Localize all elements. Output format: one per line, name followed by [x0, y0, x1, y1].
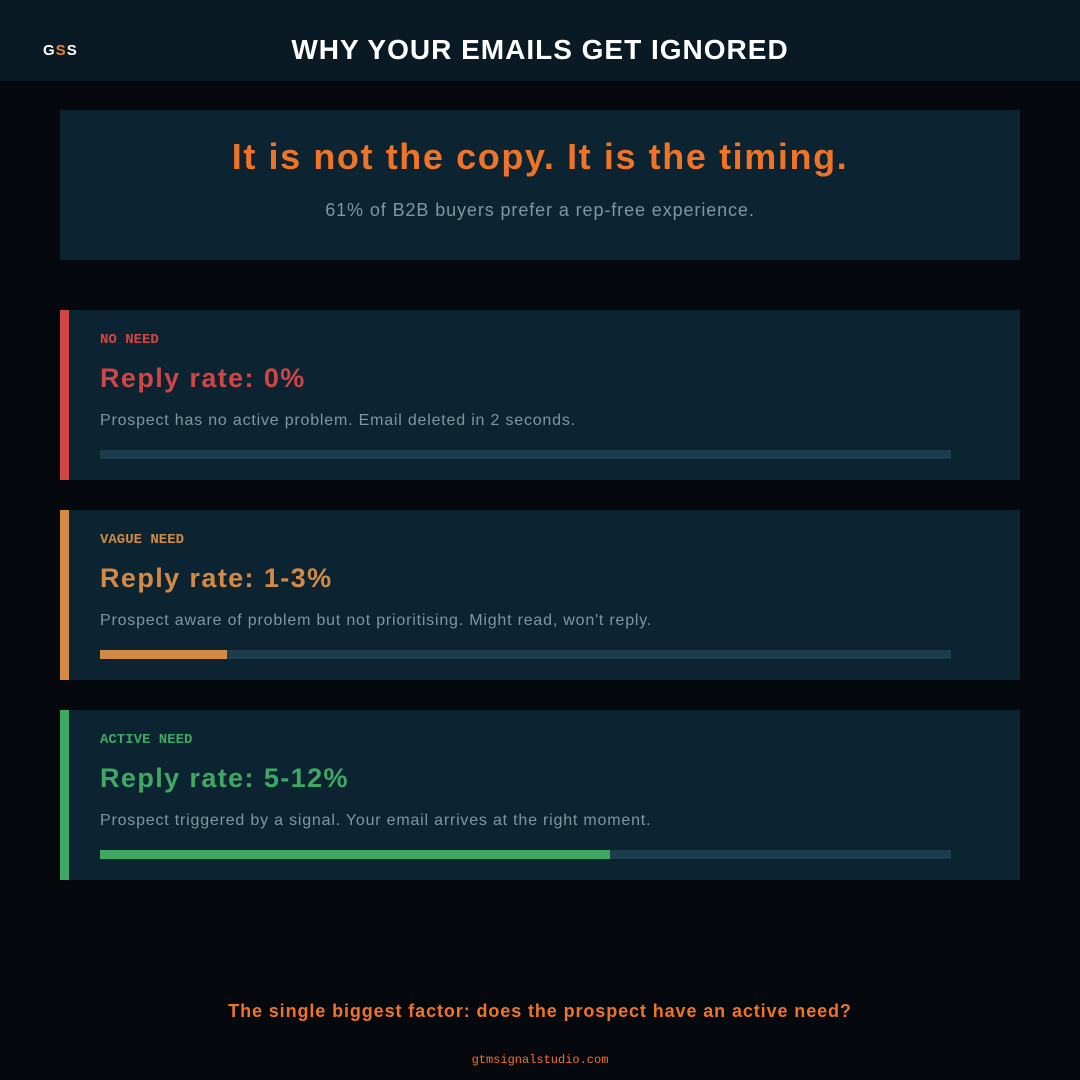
panel: active need — [60, 710, 1020, 880]
bar: 0% — [100, 450, 951, 459]
footer callout: The single biggest factor: does the prospect have an active need? — [228, 1001, 852, 1021]
label: NO NEED — [100, 332, 159, 348]
description: Prospect aware of problem but not prioritising. Might read, won't reply. — [100, 612, 652, 629]
header bar — [0, 0, 1080, 81]
title: WHY YOUR EMAILS GET IGNORED — [291, 34, 789, 65]
reply rate: Reply rate: 0% — [100, 363, 306, 393]
description: Prospect triggered by a signal. Your email arrives at the right moment. — [100, 812, 651, 829]
label: VAGUE NEED — [100, 532, 184, 548]
headline: It is not the copy. It is the timing. — [232, 136, 848, 177]
reply rate: Reply rate: 5-12% — [100, 763, 349, 793]
reply rate: Reply rate: 1-3% — [100, 563, 332, 593]
panel: no need — [60, 310, 1020, 480]
description: Prospect has no active problem. Email deleted in 2 seconds. — [100, 412, 576, 429]
label: ACTIVE NEED — [100, 732, 192, 748]
subtitle: 61% of B2B buyers prefer a rep-free experience. — [325, 200, 755, 220]
url: gtmsignalstudio.com — [472, 1053, 608, 1067]
hero panel — [60, 110, 1020, 260]
panel: vague need — [60, 510, 1020, 680]
bar: 5-12% — [100, 850, 951, 859]
bar: 1-3% — [100, 650, 951, 659]
logo: GSS — [43, 42, 78, 59]
